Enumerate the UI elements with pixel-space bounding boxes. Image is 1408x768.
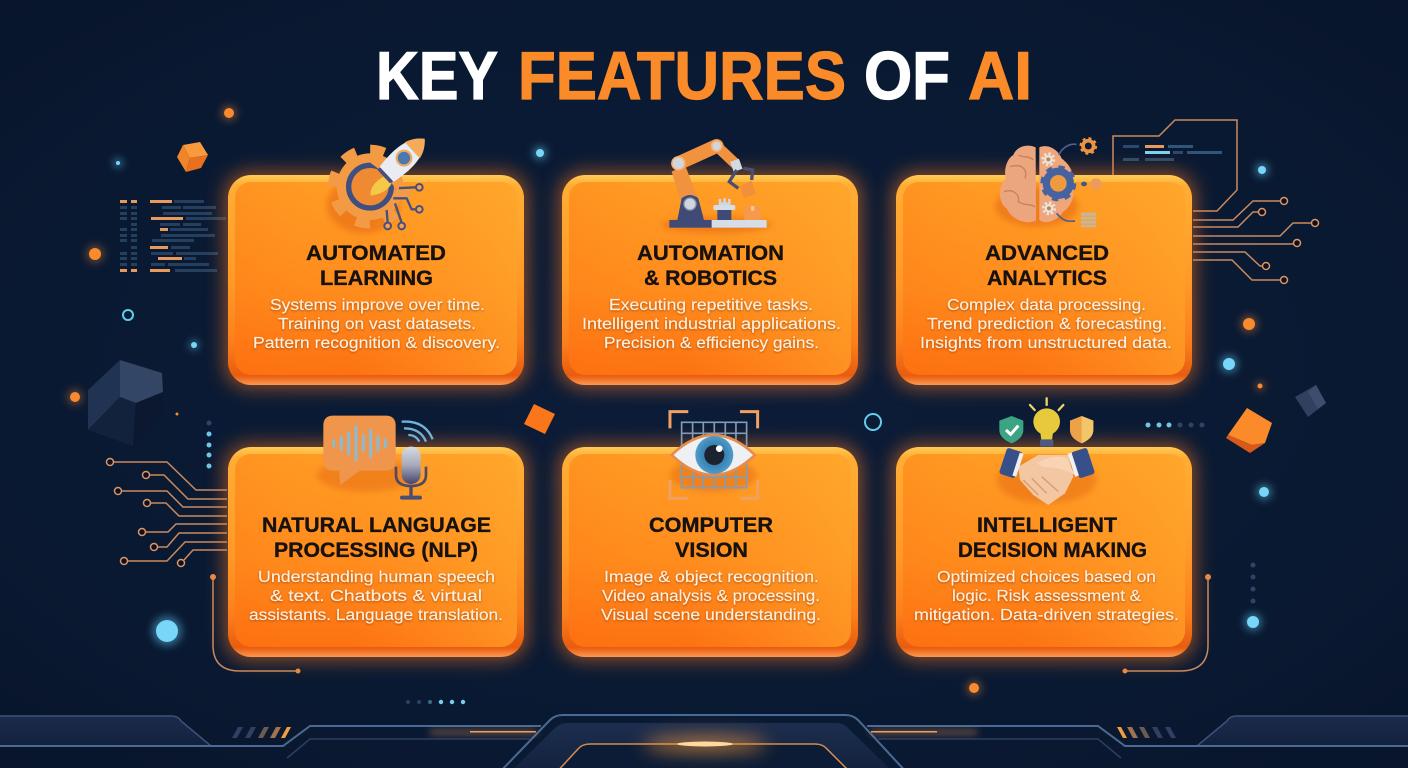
body text: mitigation. Data-driven strategies.	[914, 607, 1179, 624]
body text	[601, 569, 821, 624]
heading: COMPUTER	[649, 513, 773, 537]
code panel: top right	[1113, 120, 1237, 211]
heading	[637, 241, 784, 290]
title: KEY	[376, 38, 498, 114]
panel: natural language processing	[224, 443, 528, 661]
hash marks left	[232, 727, 291, 738]
indicator dots	[406, 700, 465, 704]
heading: INTELLIGENT	[977, 513, 1117, 537]
heading	[958, 513, 1147, 562]
body text: Visual scene understanding.	[601, 607, 821, 624]
body text: Video analysis & processing.	[602, 588, 820, 605]
icon: handshake with bulb and shields	[997, 398, 1097, 505]
heading: PROCESSING (NLP)	[274, 538, 478, 562]
heading	[262, 513, 491, 562]
circuit: bottom right connector	[1122, 574, 1211, 674]
icon: eye with scanning grid	[670, 412, 758, 498]
heading: AUTOMATED	[306, 241, 446, 265]
body text: Pattern recognition & discovery.	[253, 335, 500, 352]
left panel	[0, 716, 211, 746]
panel: automation and robotics	[558, 171, 862, 389]
cube: top left orange	[177, 142, 208, 172]
body text: Training on vast datasets.	[278, 316, 476, 333]
body text	[914, 569, 1179, 624]
body text: Image & object recognition.	[604, 569, 819, 586]
circuit: right	[1193, 198, 1318, 284]
body text: Systems improve over time.	[270, 297, 485, 314]
body text: Intelligent industrial applications.	[582, 316, 841, 333]
heading: AUTOMATION	[637, 241, 784, 265]
icon: speech bubble and microphone	[317, 416, 433, 500]
body text: Understanding human speech	[258, 569, 495, 586]
center glow	[643, 736, 767, 752]
title	[376, 38, 1032, 114]
heading: ADVANCED	[985, 241, 1109, 265]
heading: VISION	[675, 538, 748, 562]
body text: assistants. Language translation.	[249, 607, 503, 624]
heading	[306, 241, 446, 290]
body text: Executing repetitive tasks.	[609, 297, 813, 314]
right panel	[1197, 716, 1408, 746]
code lines: left	[120, 200, 226, 272]
orange streaks	[430, 731, 977, 734]
heading: DECISION MAKING	[958, 538, 1147, 562]
panel: automated learning	[224, 171, 528, 389]
title: AI	[968, 38, 1032, 114]
heading	[649, 513, 773, 562]
title: FEATURES	[518, 38, 846, 114]
cube: right grey	[1295, 385, 1326, 417]
hash marks right	[1117, 727, 1176, 738]
heading: LEARNING	[320, 266, 433, 290]
icon: robot arm	[662, 141, 772, 233]
body text	[582, 297, 841, 352]
heading: NATURAL LANGUAGE	[262, 513, 491, 537]
body text: logic. Risk assessment &	[952, 588, 1142, 605]
body text	[249, 569, 503, 624]
circuit: bottom left connector	[210, 574, 300, 674]
body text: Optimized choices based on	[937, 569, 1156, 586]
circuit: left	[106, 458, 227, 566]
panel: computer vision	[558, 443, 862, 661]
body text: & text. Chatbots & virtual	[270, 588, 482, 605]
panel: advanced analytics	[892, 171, 1196, 389]
heading: ANALYTICS	[987, 266, 1107, 290]
icon: gear and rocket	[327, 123, 440, 233]
body text: Precision & efficiency gains.	[604, 335, 819, 352]
title: OF	[864, 38, 950, 114]
body text	[920, 297, 1172, 352]
cube: orange diamond	[524, 404, 555, 434]
body text: Trend prediction & forecasting.	[927, 316, 1167, 333]
heading	[985, 241, 1109, 290]
cube: dark polyhedron	[88, 360, 163, 446]
floating dots	[67, 105, 1272, 696]
heading: & ROBOTICS	[644, 266, 777, 290]
bottom console frame	[0, 700, 1408, 768]
body text	[253, 297, 500, 352]
body text: Complex data processing.	[947, 297, 1146, 314]
center console	[497, 715, 909, 768]
panel: intelligent decision making	[892, 443, 1196, 661]
cube: right orange	[1226, 408, 1272, 453]
body text: Insights from unstructured data.	[920, 335, 1172, 352]
icon: brain and gears	[995, 138, 1102, 227]
